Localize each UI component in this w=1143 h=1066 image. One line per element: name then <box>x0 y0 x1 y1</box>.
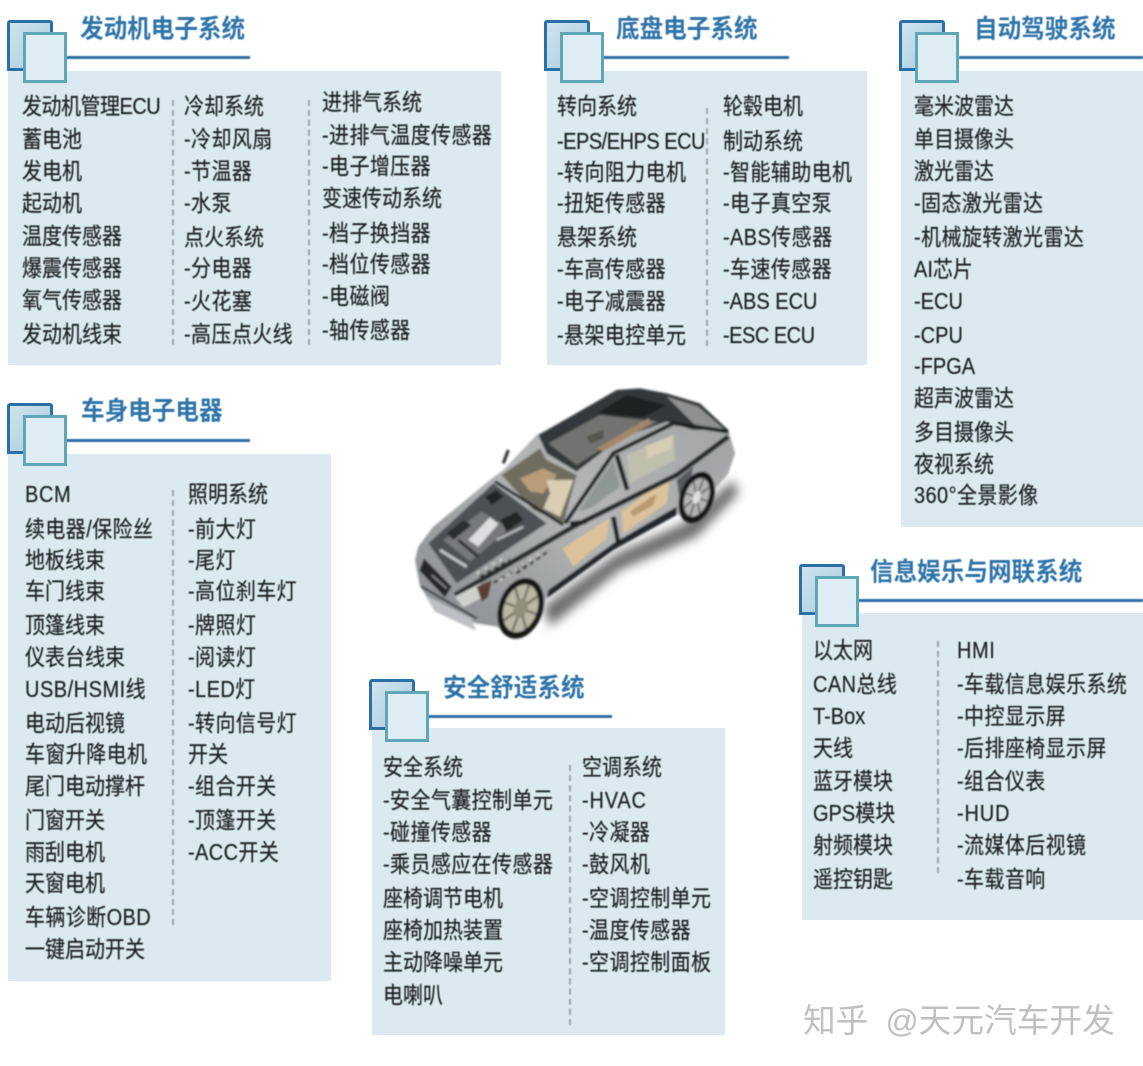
list column: 超声波雷达 <box>914 386 1014 412</box>
list column: 夜视系统 <box>914 452 994 478</box>
list column 1: 悬架系统 <box>557 225 637 251</box>
list column 2: -HVAC <box>582 788 647 814</box>
heading: engine electronics: 发动机电子系统 <box>80 16 245 44</box>
body silhouette <box>415 388 735 638</box>
heading: body electronics: 车身电子电器 <box>81 398 223 426</box>
sunroof glass <box>548 415 658 465</box>
front fender details <box>480 550 550 587</box>
panel background <box>8 454 331 981</box>
list column 1: USB/HSMI线 <box>25 677 146 703</box>
list column 2 <box>184 94 293 348</box>
list column 3: -档子换挡器 <box>322 221 431 247</box>
list column 2: 照明系统 <box>188 482 268 508</box>
list column 3 <box>322 90 492 344</box>
list column 2: -分电器 <box>184 256 252 282</box>
list column 1: GPS模块 <box>813 801 895 827</box>
list column 2: -ABS传感器 <box>723 225 832 251</box>
car shadow <box>543 480 738 627</box>
list column: 毫米波雷达 <box>914 94 1014 120</box>
list column 1: 发动机管理ECU <box>22 94 160 120</box>
illustration: cutaway car <box>414 386 744 640</box>
list column 1: -电子减震器 <box>557 289 666 315</box>
icon: stacked squares <box>7 20 67 83</box>
frame lines <box>565 423 728 523</box>
list column 1: 天窗电机 <box>25 871 105 897</box>
list column 1: 起动机 <box>22 191 82 217</box>
list column 1 <box>24 482 153 963</box>
list column 1: 尾门电动撑杆 <box>25 774 145 800</box>
list column 2: -高位刹车灯 <box>188 579 297 605</box>
list column 1: 一键启动开关 <box>25 937 145 963</box>
list column 2: 开关 <box>188 742 228 768</box>
list column 1: 仪表台线束 <box>25 645 125 671</box>
list column 3: -电子增压器 <box>322 154 431 180</box>
list column 2: -中控显示屏 <box>957 704 1066 730</box>
list column 2: -组合仪表 <box>957 769 1046 795</box>
list column 2: -ACC开关 <box>188 840 279 866</box>
list column 1: 车窗升降电机 <box>25 742 147 768</box>
panel: body electronics <box>7 396 331 981</box>
list column 2: -前大灯 <box>188 517 256 543</box>
list column 2 <box>582 754 711 976</box>
rear quarter panel <box>677 442 735 503</box>
list column 3: 进排气系统 <box>322 90 422 116</box>
list column 1: 顶篷线束 <box>25 613 105 639</box>
list column 1: 温度传感器 <box>22 224 122 250</box>
icon: stacked squares <box>799 564 859 627</box>
panel background <box>8 71 501 365</box>
list column 2: -车速传感器 <box>723 257 832 283</box>
front bumper <box>425 595 476 631</box>
list column 2 <box>188 482 297 866</box>
list column 2: -温度传感器 <box>582 918 691 944</box>
list column 1 <box>556 94 705 349</box>
list column: 单目摄像头 <box>914 127 1014 153</box>
list column 2: -空调控制单元 <box>582 886 711 912</box>
list column 2: -火花塞 <box>184 289 252 315</box>
list column 2: -车载信息娱乐系统 <box>957 672 1127 698</box>
list column 1: 续电器/保险丝 <box>25 517 153 543</box>
headlight <box>455 583 484 607</box>
heading: chassis electronics: 底盘电子系统 <box>616 16 758 44</box>
panel background <box>802 613 1143 920</box>
door interiors <box>563 518 609 567</box>
engine bay <box>428 483 547 583</box>
list column 1: 主动降噪单元 <box>383 950 503 976</box>
list column 1: -安全气囊控制单元 <box>383 788 553 814</box>
list column 1: 发动机线束 <box>22 322 122 348</box>
list column 2: -高压点火线 <box>184 322 293 348</box>
list column 1: T-Box <box>813 704 865 730</box>
watermark: 知乎 @天元汽车开发 <box>803 1002 1115 1039</box>
list column 1: 车辆诊断OBD <box>25 905 151 931</box>
list column 1: 地板线束 <box>25 548 105 574</box>
list column 2: -冷凝器 <box>582 820 650 846</box>
panel: autonomous driving <box>899 14 1143 527</box>
list column: AI芯片 <box>914 257 973 283</box>
roof <box>538 388 728 472</box>
list column: -CPU <box>914 323 963 349</box>
list column 2: -后排座椅显示屏 <box>957 736 1107 762</box>
list column: 360°全景影像 <box>914 483 1039 509</box>
list column 3: -进排气温度传感器 <box>322 123 492 149</box>
list column 1: 天线 <box>813 736 853 762</box>
list column 2: -空调控制面板 <box>582 950 711 976</box>
panel: infotainment and connectivity <box>799 558 1143 920</box>
list column 2: 制动系统 <box>723 129 803 155</box>
list column 3: -电磁阀 <box>322 284 390 310</box>
icon: stacked squares <box>7 403 67 466</box>
list column 1: 电动后视镜 <box>25 711 125 737</box>
car artwork <box>415 388 735 645</box>
list column 2: -智能辅助电机 <box>723 160 852 186</box>
list column 1: 以太网 <box>813 638 873 664</box>
list column 2: -牌照灯 <box>188 613 256 639</box>
list column: 激光雷达 <box>914 159 994 185</box>
list column 1 <box>382 754 553 1009</box>
list column 1: CAN总线 <box>813 672 897 698</box>
rear wheel <box>672 467 721 528</box>
list column 2: -HUD <box>957 801 1010 827</box>
list column 1: 蓝牙模块 <box>813 769 893 795</box>
list column 1: 转向系统 <box>557 94 637 120</box>
list column 2 <box>956 638 1127 893</box>
list column: 多目摄像头 <box>914 420 1014 446</box>
windshield with seats <box>502 448 577 523</box>
panel: engine electronics <box>7 14 501 365</box>
panel: safety and comfort <box>369 674 725 1035</box>
list column <box>913 94 1084 509</box>
list column 1: -乘员感应在传感器 <box>383 852 553 878</box>
list column 3: 变速传动系统 <box>322 186 442 212</box>
list column 1: 安全系统 <box>383 755 463 781</box>
list column 3: -轴传感器 <box>322 318 411 344</box>
list column 1: 蓄电池 <box>22 127 82 153</box>
list column: -FPGA <box>914 354 975 380</box>
list column 2: -电子真空泵 <box>723 191 832 217</box>
list column 1 <box>812 638 897 893</box>
front wheel <box>489 571 552 645</box>
list column 1: BCM <box>25 482 71 508</box>
list column 2: -流媒体后视镜 <box>957 833 1086 859</box>
list column 1: 发电机 <box>22 159 82 185</box>
list column 2: -组合开关 <box>188 774 277 800</box>
list column 1: -EPS/EHPS ECU <box>557 129 705 155</box>
list column 1: -转向阻力电机 <box>557 160 686 186</box>
list column: -ECU <box>914 289 963 315</box>
icon: stacked squares <box>544 20 604 83</box>
panel background <box>372 728 725 1035</box>
heading: safety and comfort: 安全舒适系统 <box>443 675 585 703</box>
list column 2: -鼓风机 <box>582 852 650 878</box>
list column 1: -扭矩传感器 <box>557 191 666 217</box>
list column 2: -车载音响 <box>957 867 1046 893</box>
panel background <box>547 71 867 365</box>
list column 2: -水泵 <box>184 191 232 217</box>
list column 2: -尾灯 <box>188 548 236 574</box>
list column 2: -阅读灯 <box>188 645 256 671</box>
list column 1: 座椅加热装置 <box>383 918 503 944</box>
list column 1: 雨刮电机 <box>25 840 105 866</box>
list column 2: -ESC ECU <box>723 323 815 349</box>
list column 1: 射频模块 <box>813 833 893 859</box>
heading: autonomous driving: 自动驾驶系统 <box>974 16 1116 44</box>
side windows <box>578 460 620 512</box>
list column 1 <box>22 94 160 348</box>
list column 1: -悬架电控单元 <box>557 323 686 349</box>
list column 1: -车高传感器 <box>557 257 666 283</box>
list column 2: HMI <box>957 638 995 664</box>
list column 1: -碰撞传感器 <box>383 820 492 846</box>
list column 1: 车门线束 <box>25 579 105 605</box>
list column 2: 冷却系统 <box>184 94 264 120</box>
list column 2 <box>722 94 852 349</box>
heading: infotainment and connectivity: 信息娱乐与网联系统 <box>870 559 1082 587</box>
list column 2: -LED灯 <box>188 677 256 703</box>
list column 2: 空调系统 <box>582 755 662 781</box>
list column 1: 遥控钥匙 <box>813 867 893 893</box>
list column 3: -档位传感器 <box>322 252 431 278</box>
list column 1: 爆震传感器 <box>22 256 122 282</box>
list column 1: 座椅调节电机 <box>383 886 503 912</box>
grille <box>419 558 452 597</box>
list column 2: -转向信号灯 <box>188 711 297 737</box>
list column 2: -顶篷开关 <box>188 808 277 834</box>
list column 1: 门窗开关 <box>25 808 105 834</box>
list column: -固态激光雷达 <box>914 191 1043 217</box>
list column 2: -ABS ECU <box>723 289 817 315</box>
list column: -机械旋转激光雷达 <box>914 225 1084 251</box>
icon: stacked squares <box>899 20 959 83</box>
door sill panel <box>547 507 677 598</box>
panel: chassis electronics <box>544 14 867 365</box>
list column 1: 电喇叭 <box>383 983 443 1009</box>
panel background <box>901 71 1143 527</box>
list column 2: -冷却风扇 <box>184 127 273 153</box>
icon: stacked squares <box>369 679 429 742</box>
list column 2: 轮毂电机 <box>723 94 803 120</box>
list column 2: 点火系统 <box>184 225 264 251</box>
list column 1: 氧气传感器 <box>22 288 122 314</box>
list column 2: -节温器 <box>184 159 252 185</box>
